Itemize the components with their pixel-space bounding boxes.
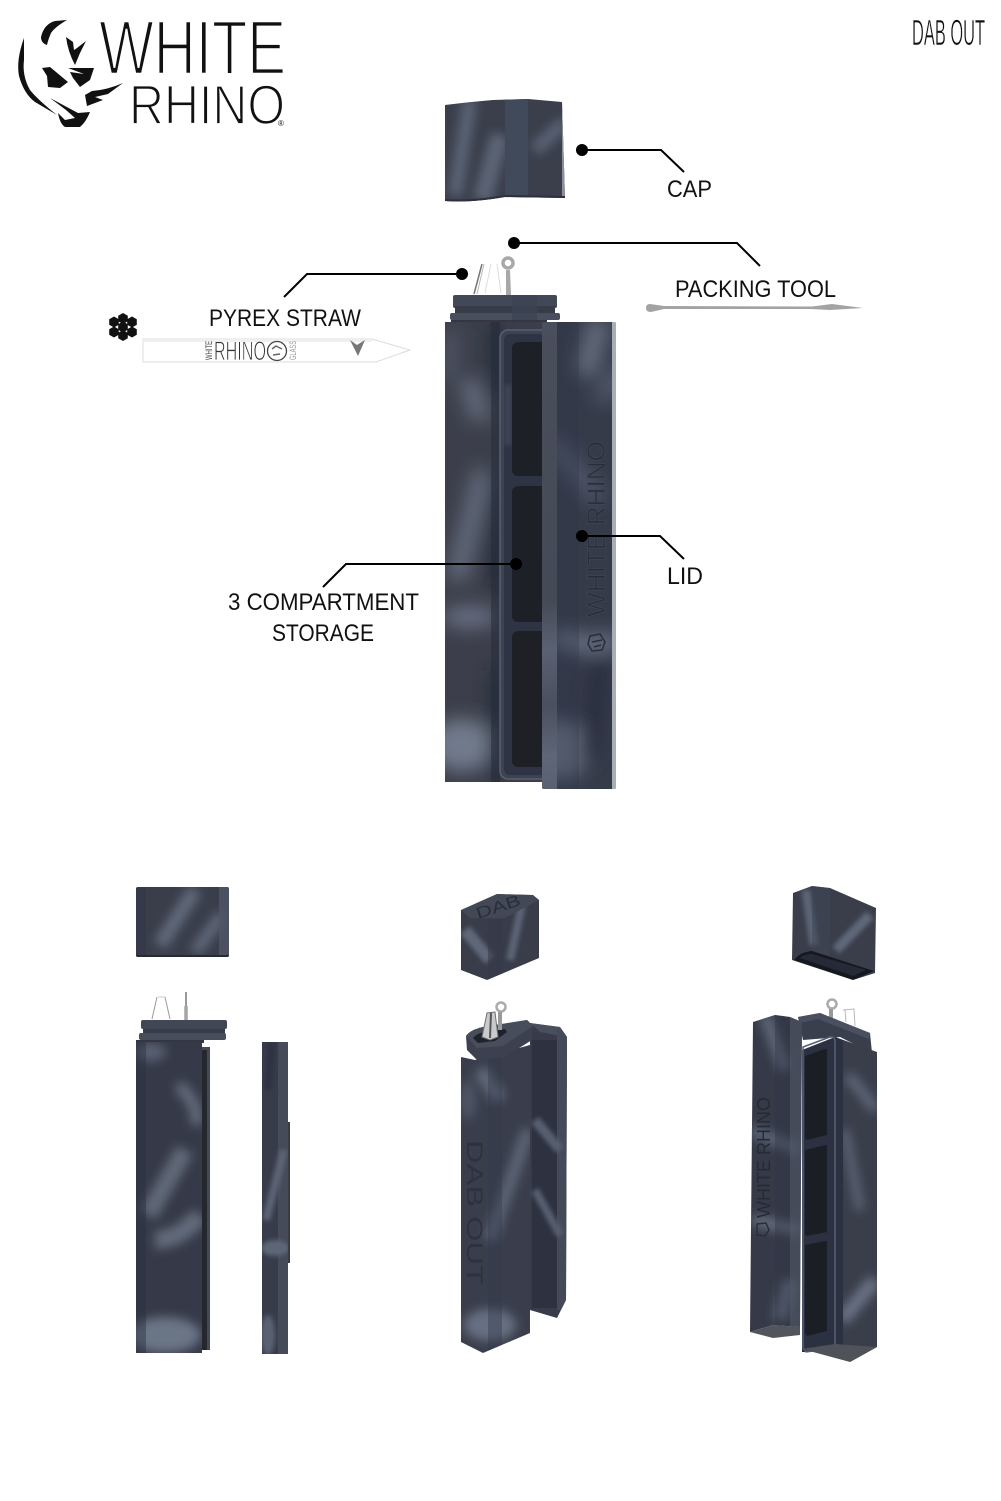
label: cap: CAP: [667, 176, 712, 203]
body: [129, 1042, 202, 1353]
cap: [136, 887, 229, 957]
lid underside: [750, 1325, 800, 1338]
engraved edge: [288, 1122, 290, 1263]
cap: [461, 894, 539, 980]
compartment frame: [500, 330, 560, 779]
illustration: pyrex straw: [143, 336, 410, 366]
compartment: bottom: [512, 631, 552, 767]
collar and opening: [466, 1020, 533, 1060]
engraved text: DAB OUT: [462, 1140, 487, 1285]
view 2: three-quarter back view: [455, 890, 570, 1360]
body: [836, 1037, 877, 1362]
collar: [136, 1020, 227, 1043]
lid: [542, 322, 616, 789]
body: [445, 322, 542, 782]
frame: [802, 1037, 843, 1352]
collar: [798, 1013, 872, 1053]
leader: lid: [576, 530, 684, 559]
lid: [748, 1012, 804, 1335]
icon: packing tool: [646, 304, 863, 312]
label: 3 compartment storage: STORAGE: [272, 620, 374, 647]
compartment: bottom: [805, 1241, 827, 1336]
view 1: side view: [129, 887, 290, 1355]
leader: cap: [576, 144, 684, 172]
wordmark WHITE: WHITE: [99, 5, 286, 91]
compartment: middle: [805, 1145, 827, 1236]
logo: White Rhino: [18, 5, 286, 136]
packing tool tip, main view: [503, 258, 513, 295]
icon: rhino head: [18, 20, 123, 127]
engraved text: White Rhino: WHITE RHINO: [583, 441, 611, 617]
leader: packing tool: [508, 237, 760, 266]
view 3: three-quarter front view: [748, 884, 880, 1365]
icon: hexagon cluster: [109, 313, 137, 341]
straw and tool tips: [152, 992, 186, 1020]
registered mark: ®: [278, 119, 284, 128]
collar: [450, 295, 560, 323]
product: main case with open lid: [445, 295, 616, 789]
body: [461, 1045, 530, 1353]
engraved logo: [757, 1223, 769, 1236]
frame edge: [202, 1047, 210, 1350]
compartment: middle: [512, 486, 552, 622]
illustration: pyrex straw: RHINO: [214, 336, 266, 366]
compartment: top: [805, 1049, 827, 1140]
engraved text: WHITE RHINO: [754, 1097, 774, 1218]
wordmark RHINO: RHINO: [129, 73, 285, 136]
base: [802, 1344, 877, 1362]
illustration: pyrex straw: WHITE: [204, 341, 214, 360]
straw and tool tips: [482, 1002, 506, 1040]
lid: [530, 1023, 567, 1318]
leader: compartment storage: [323, 558, 522, 587]
engraved logo: [588, 634, 605, 651]
straw and tool tips: [828, 1000, 855, 1026]
cap: [792, 886, 876, 980]
label: lid: LID: [667, 563, 703, 590]
lid side: [261, 1042, 289, 1355]
label: 3 compartment storage: 3 COMPARTMENT: [228, 589, 419, 616]
cap engraved logo: DAB: [474, 892, 523, 923]
product: cap, main view: [445, 99, 565, 202]
leader: pyrex straw: [284, 268, 468, 297]
glass straw tip, main view: [474, 264, 501, 294]
label: packing tool: PACKING TOOL: [675, 276, 836, 303]
compartment: top: [512, 342, 552, 476]
label: pyrex straw: PYREX STRAW: [209, 305, 361, 332]
illustration: pyrex straw: GLASS: [288, 341, 298, 360]
label: 3 compartment storage: [228, 589, 419, 647]
